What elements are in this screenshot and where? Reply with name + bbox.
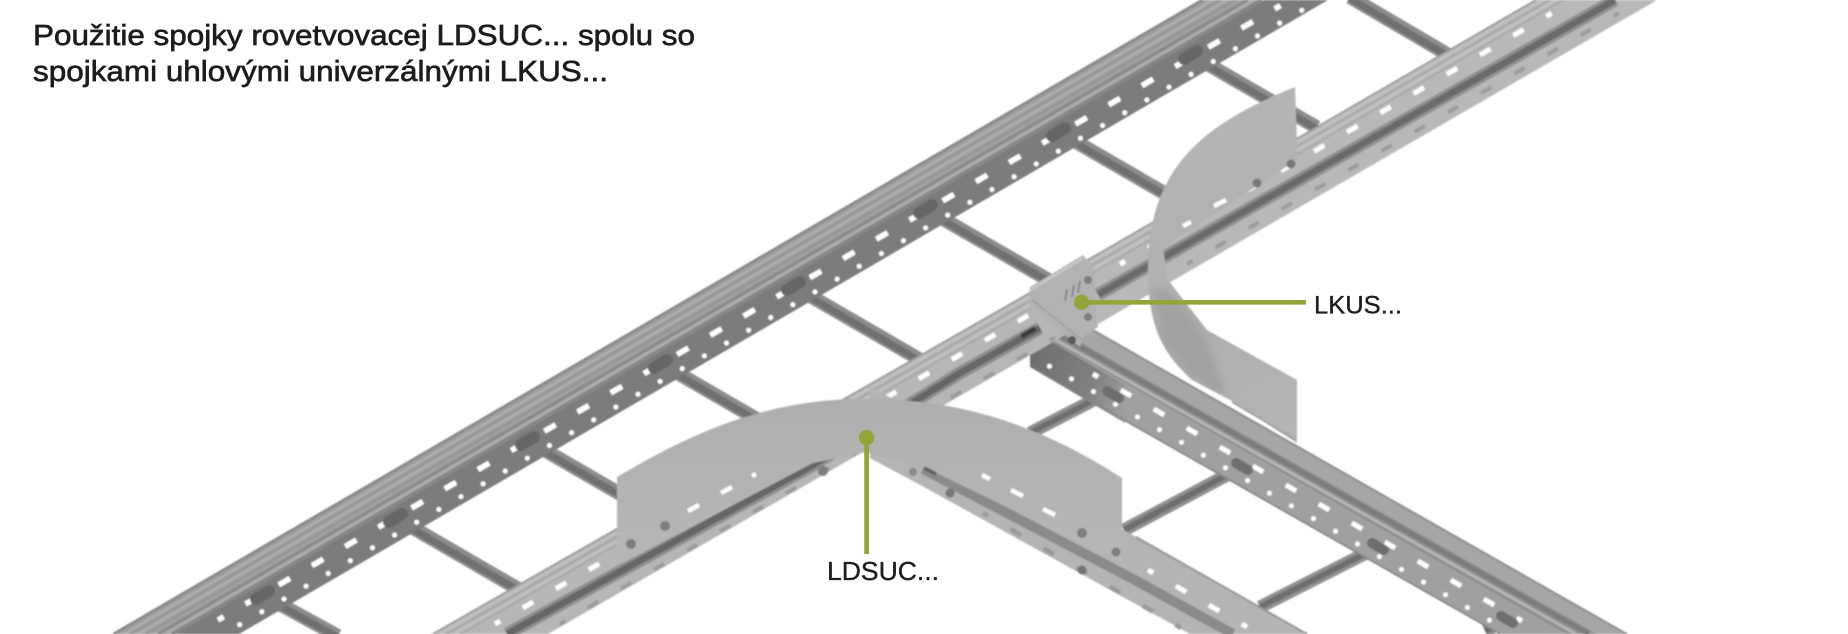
lower plate crease bbox=[1232, 402, 1296, 440]
callout: LDSUC: LDSUC... bbox=[827, 558, 939, 586]
branch rail dots bbox=[1050, 366, 1490, 620]
callout: LKUS: LKUS... bbox=[1314, 291, 1402, 319]
junction end of web, darker bbox=[1030, 329, 1125, 423]
plate: LDSUC branch connector bbox=[617, 399, 1122, 563]
upper rail of branch ladder bbox=[1030, 299, 1628, 634]
groove bbox=[507, 328, 1040, 634]
lower rail of branch ladder bbox=[870, 386, 1307, 634]
back rail of main ladder bbox=[112, 0, 1328, 634]
plate bolts bbox=[1286, 160, 1296, 168]
callout: LDSUC bbox=[827, 430, 939, 586]
callout: LKUS bbox=[1074, 291, 1402, 319]
title bbox=[33, 20, 695, 88]
back rail dots bbox=[240, 10, 1302, 625]
ribs on front rail bbox=[433, 0, 1563, 634]
rungs of main ladder bbox=[262, 0, 1452, 634]
front rail upper-right section bbox=[1090, 0, 1657, 324]
front rail lower-left section bbox=[431, 253, 1098, 634]
junction bracket bbox=[1020, 255, 1098, 347]
groove bbox=[923, 469, 1233, 634]
grey slots bbox=[560, 338, 1055, 624]
plate slots bbox=[688, 474, 1055, 515]
rungs of branch ladder bbox=[1030, 390, 1507, 631]
branch rail slots bbox=[1093, 374, 1522, 621]
back rail slots bbox=[218, 6, 1280, 620]
slots bbox=[495, 299, 1056, 624]
grey slots bbox=[983, 513, 1181, 628]
plate slots bbox=[1183, 200, 1226, 226]
slots bbox=[1148, 570, 1247, 627]
plate: LKUS angle connector bbox=[1148, 87, 1297, 443]
plate bolts bbox=[660, 521, 670, 531]
groove bbox=[1098, 0, 1615, 295]
grey slots bbox=[1187, 13, 1619, 264]
slots bbox=[1120, 13, 1552, 264]
bolts bbox=[946, 488, 954, 498]
title: Použitie spojky rovetvovacej LDSUC... spolu so bbox=[33, 20, 695, 52]
title: spojkami uhlovými univerzálnými LKUS... bbox=[33, 56, 608, 88]
twisted band shading bbox=[1154, 291, 1223, 393]
